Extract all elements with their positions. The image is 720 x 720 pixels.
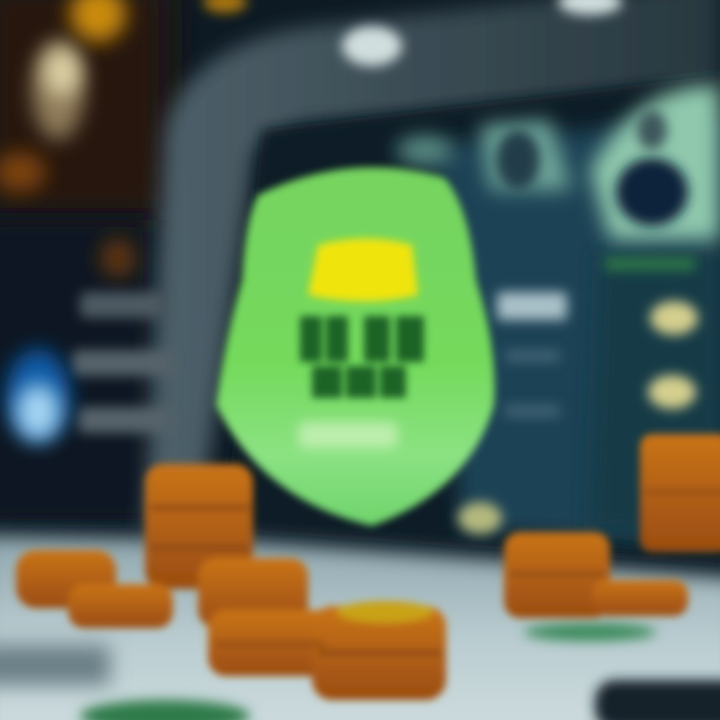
left side panel with text rows and blue glow [6, 292, 172, 441]
dark green headline [300, 316, 424, 398]
screen portraits [397, 85, 720, 240]
coin stacks right [504, 434, 720, 618]
green shield [216, 167, 495, 526]
coin stacks left [16, 464, 446, 700]
yellow banner [308, 238, 418, 302]
pale caption [298, 422, 398, 448]
coin edge ridges [150, 505, 442, 655]
screen [225, 75, 720, 565]
coin edge ridges right [510, 490, 720, 576]
ceiling lights [0, 0, 247, 278]
screen details: rows and badges [458, 258, 698, 534]
desk [0, 535, 720, 720]
monitor frame [145, 0, 720, 530]
